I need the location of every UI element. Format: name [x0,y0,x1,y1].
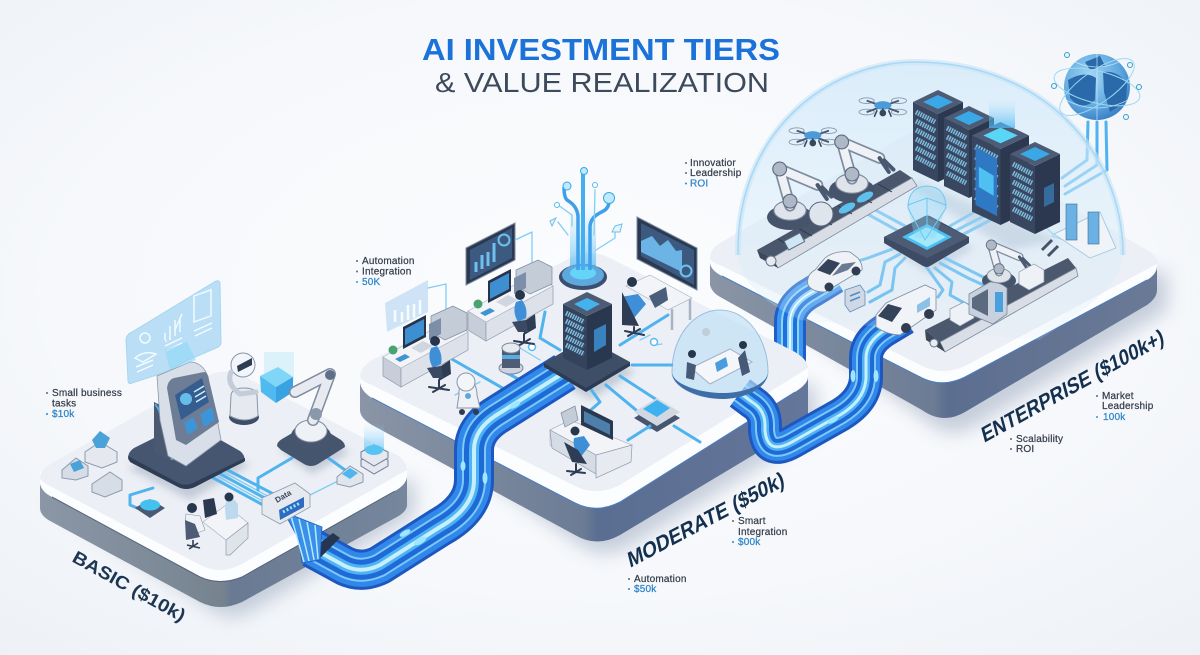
data box: Data [274,488,293,505]
text block: market leadership bullets: 100k [1103,412,1126,423]
circuit lines: moderate tier [450,312,672,428]
conveyor with robot arm and scanner gate [925,240,1078,352]
circuit lines: enterprise tier [855,122,1114,305]
text block: automation price bullets: $50k [634,584,657,595]
text block: scalability bullets: Scalability [1016,434,1063,445]
workstation 1 [383,306,468,392]
icon: data stack [361,423,388,474]
text block: scalability bullets [1010,434,1063,455]
text block: automation bullets: Integration [362,266,411,278]
text block: basic bullets [46,388,122,420]
panel: basic tier platform [40,372,415,617]
desk with two people [185,492,248,555]
server racks [913,90,1060,234]
text block: scalability bullets: ROI [1016,444,1034,455]
hologram data tree [550,168,622,290]
text block: automation price bullets [628,574,687,595]
icon: drone lower [789,128,837,147]
text block: innovation bullets: Leadership [690,168,742,179]
text block: market leadership bullets: Leadership [1102,401,1154,412]
dome: enterprise protection shell [738,62,1123,340]
label: enterprise tier: ENTERPRISE ($100k+) [979,324,1166,448]
text block: innovation bullets: ROI [690,178,708,190]
title: AI INVESTMENT TIERS [422,32,780,67]
text block: innovation bullets: Innovatior [690,158,736,169]
text block: automation bullets [356,256,415,288]
text block: basic bullets: tasks [52,398,76,410]
server tower on base plate [544,292,630,392]
flow pipe: basic tier to moderate tier server [312,372,565,570]
icon: drone upper [859,98,907,117]
text block: smart integration bullets: Integration [738,527,787,538]
icon: cooling units [1054,204,1116,258]
data box [262,483,310,524]
label: basic tier: BASIC ($10k) [69,547,189,626]
workstation 2 [468,260,553,346]
flow from data box to pipe [284,512,340,563]
text block: smart integration bullets [732,516,787,548]
wheeled pod robot [499,343,523,374]
robot arm with base [277,370,345,466]
holographic panel [126,281,221,384]
text block: automation bullets: Automation [362,256,415,267]
conveyor with robot arms [757,135,917,268]
white robot [457,373,480,415]
text block: basic bullets: Small business [52,388,122,399]
title [422,32,780,98]
flow pipe: moderate tier dome to enterprise van [740,318,905,447]
dome outline [738,62,1123,255]
text block: smart integration bullets: $00k [738,537,761,548]
text block: automation bullets: 50K [362,277,381,288]
icon: glowing parcel [260,352,294,403]
icon: small boxes [62,431,122,497]
white service robot [229,353,259,425]
text block: automation price bullets: Automation [634,574,687,585]
glass dome meeting room [672,310,768,399]
hologram chip hub [884,186,969,267]
text block: innovation bullets [685,158,742,190]
workstation 4 [550,405,700,478]
workstation 3 [622,275,692,336]
contact shadows [128,180,1060,500]
icon: car [808,252,862,292]
text block: basic bullets: $10k [52,409,75,420]
icon: small device [337,466,363,487]
translucent chart panel [385,280,446,332]
icon: small rack unit [845,285,865,312]
text block: market leadership bullets: Market [1102,391,1134,402]
kiosk on base [128,342,245,489]
glowing device [634,398,680,432]
large monitor 1 [466,223,532,285]
text block: smart integration bullets: Smart [738,516,766,527]
flow pipe: car to moderate tier [790,278,835,362]
icon: glowing button [135,499,165,518]
large monitor 2 [637,217,697,290]
icon: globe with orbits [1050,49,1144,125]
title: & VALUE REALIZATION [435,67,769,98]
label: moderate tier: MODERATE ($50k) [625,467,787,573]
text block: market leadership bullets [1096,391,1154,423]
panel: moderate tier platform [360,253,816,554]
icon: delivery van [876,285,936,335]
panel: enterprise tier platform [710,130,1167,433]
circuit lines: basic tier [130,455,345,510]
